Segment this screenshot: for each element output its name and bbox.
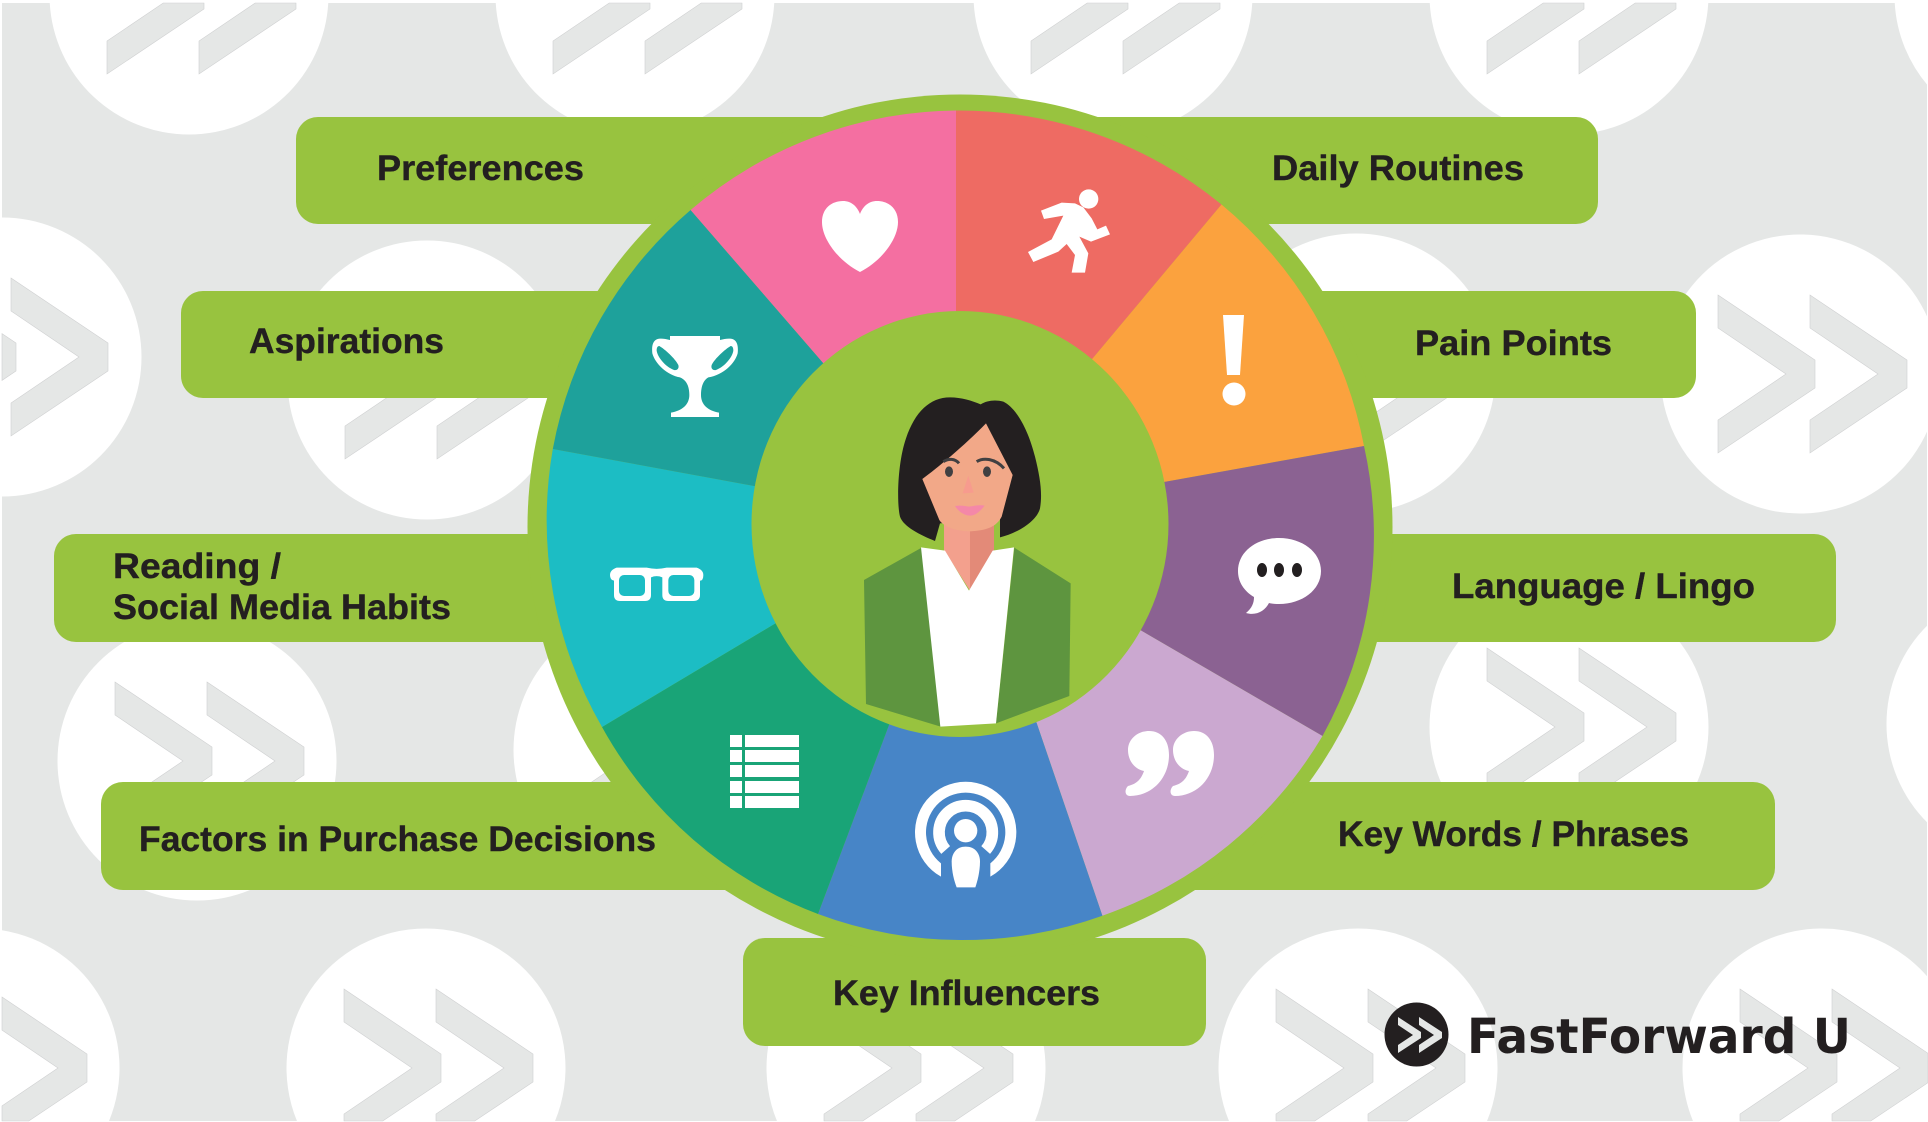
label: Key Influencers: Key Influencers	[833, 974, 1100, 1013]
icon: speech bubble	[1238, 538, 1321, 614]
eyes	[945, 466, 991, 477]
wheel centre disc	[752, 311, 1168, 737]
label: Aspirations: Aspirations	[249, 322, 444, 361]
icon: podcast	[915, 782, 1016, 887]
label: Factors in Purchase Decisions: Factors in Purchase Decisions	[139, 820, 656, 859]
icon: heart	[822, 201, 898, 272]
label: Pain Points: Pain Points	[1415, 324, 1612, 363]
label bars	[54, 117, 1836, 1046]
label: Key Words / Phrases: Key Words / Phrases	[1338, 815, 1689, 854]
wheel outer ring	[528, 94, 1392, 960]
nose	[963, 476, 974, 493]
face	[922, 423, 1013, 531]
shirt	[921, 547, 1014, 727]
icon: glasses	[610, 568, 703, 601]
label: Reading / Social Media Habits	[113, 547, 451, 627]
icon: table list	[730, 735, 799, 808]
hair	[898, 397, 1041, 541]
label: Language / Lingo: Language / Lingo	[1452, 567, 1755, 606]
label: Reading / Social Media Habits: Reading /	[113, 547, 281, 586]
jacket	[864, 548, 1071, 727]
wheel segments	[547, 110, 1374, 940]
icon: exclamation mark	[1222, 315, 1246, 406]
persona figure	[864, 397, 1071, 727]
logo: FastForward U	[1384, 1002, 1851, 1066]
icon: runner	[1028, 189, 1110, 273]
label: Preferences: Preferences	[377, 149, 584, 188]
eyebrows	[943, 459, 1004, 468]
logo mark	[1384, 1002, 1448, 1066]
lips	[955, 505, 985, 516]
icon: trophy	[652, 336, 738, 417]
label: Reading / Social Media Habits: Social Media Habits	[113, 588, 451, 627]
label: Daily Routines: Daily Routines	[1272, 149, 1524, 188]
icon: quotation marks	[1126, 731, 1214, 796]
logo wordmark: FastForward U	[1467, 1009, 1851, 1065]
neck	[944, 523, 970, 591]
